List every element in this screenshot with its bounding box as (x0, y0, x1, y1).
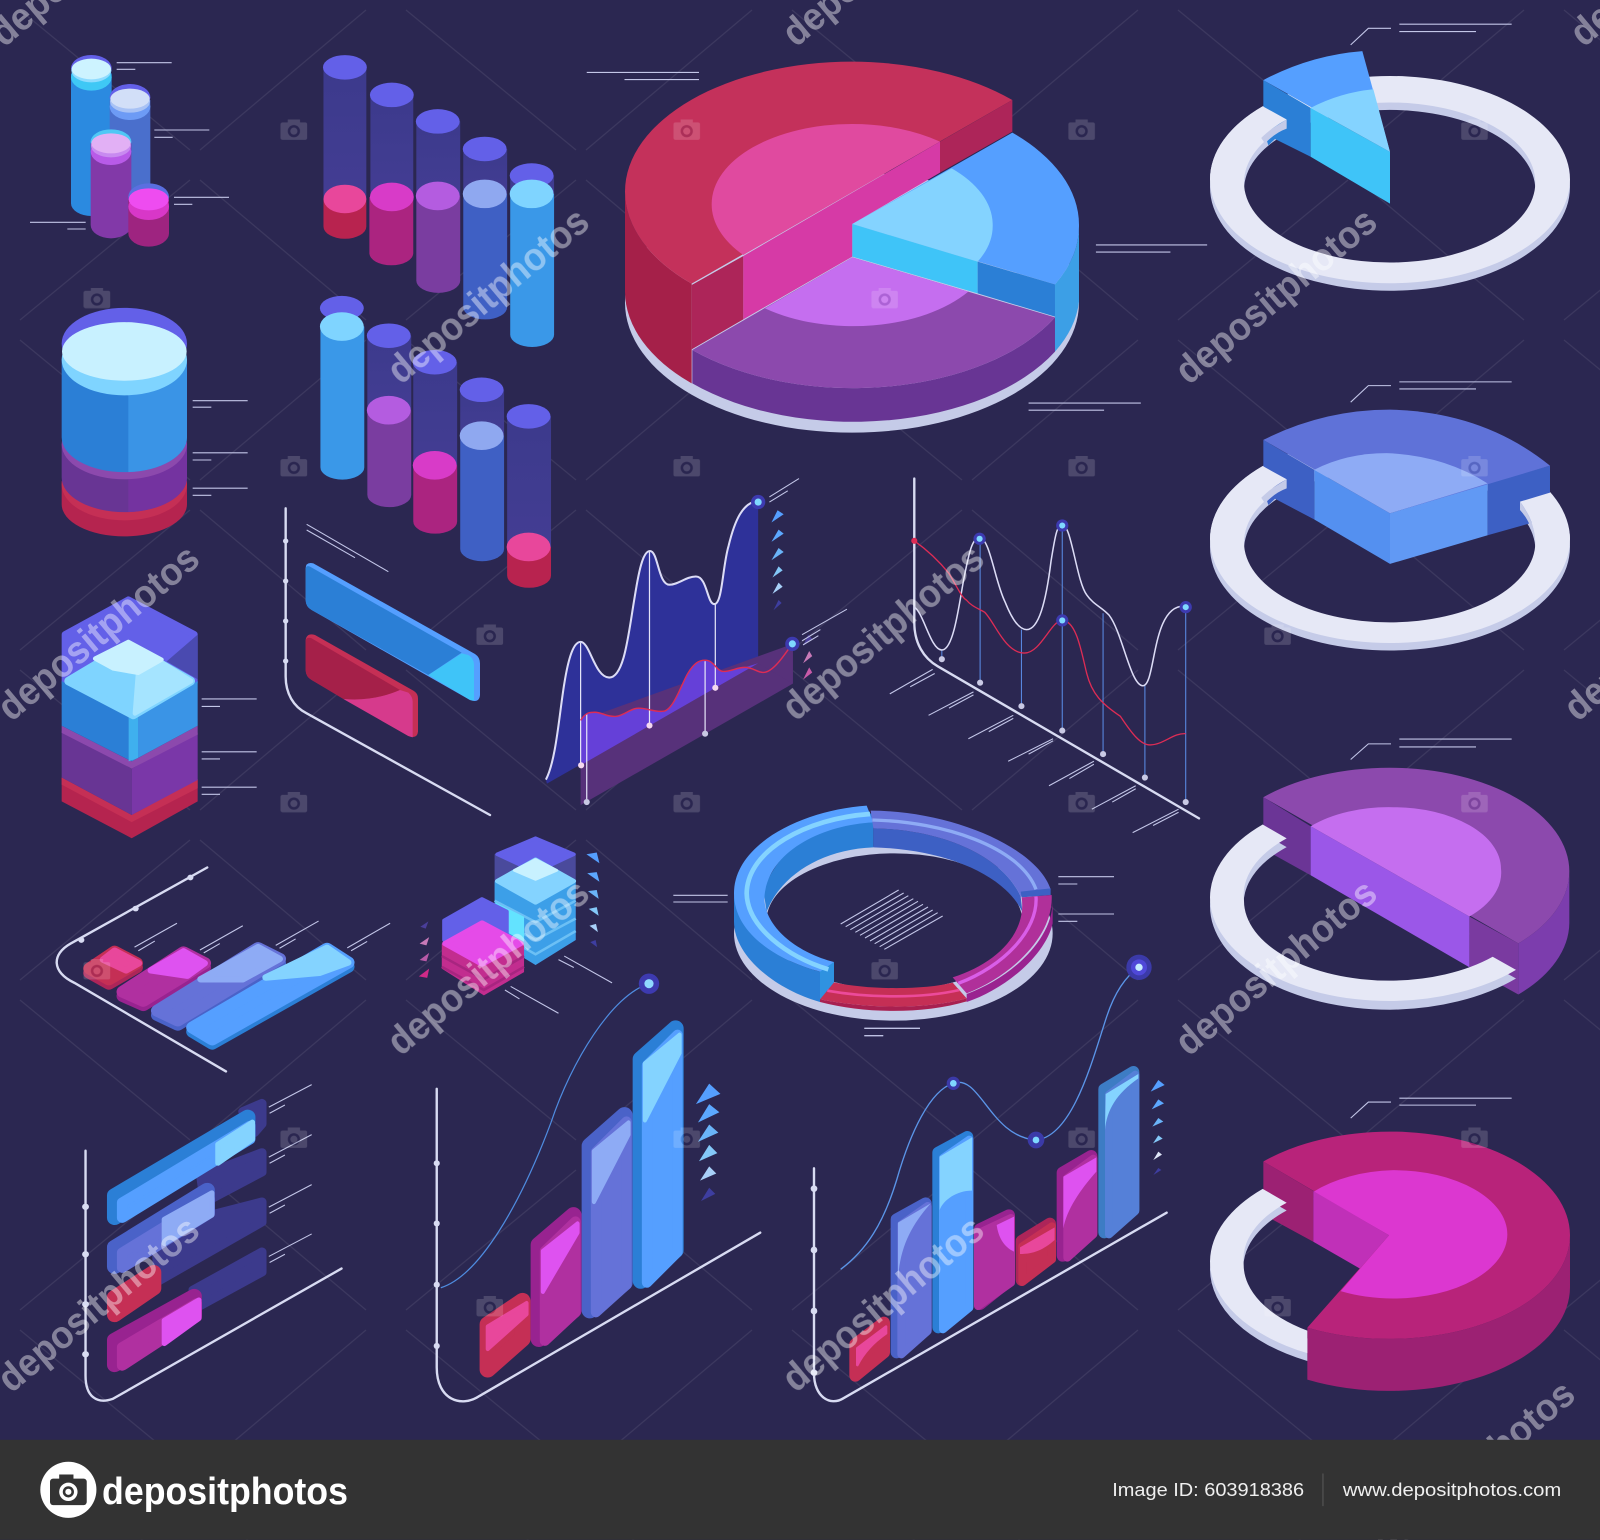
footer bar (0, 1440, 1600, 1540)
tilted bar pair with axis (283, 508, 490, 815)
upper cylinder row (323, 55, 554, 347)
main 3D pie chart (625, 62, 1079, 433)
diagonal watermark text: depositphotos (379, 871, 598, 1064)
chart: large cylinder and square stack at left (62, 308, 257, 838)
footer website: www.depositphotos.com (1342, 1479, 1561, 1500)
footer image id: Image ID: 603918386 (1112, 1479, 1304, 1500)
diagonal watermark text: depositphotos (774, 1208, 992, 1401)
ring with periwinkle slice (1210, 436, 1570, 651)
main coordinate group: pie labels, line charts, small bars (434, 72, 1207, 1401)
magenta arc segment (953, 895, 1053, 1002)
center hatch and labels (673, 877, 1114, 1036)
grouped bar chart with rising curve (434, 973, 760, 1401)
diagonal watermark text: depositphotos (1167, 871, 1385, 1064)
stacked horizontal progress bars (82, 1085, 342, 1401)
square layered stack (62, 600, 198, 838)
ring with blue-cyan slice (1210, 24, 1570, 291)
purple half pie on ring (1210, 739, 1569, 1010)
footer divider (1322, 1473, 1323, 1506)
isometric cube pair (419, 836, 612, 1013)
multi-line chart with axis (890, 479, 1199, 833)
footer logo wordmark: depositphotos (102, 1470, 348, 1512)
big layered cylinder (62, 308, 187, 536)
footer logo icon (40, 1462, 96, 1518)
chart: cylinder columns, upper and lower rows (320, 55, 554, 588)
bar chart with curve, lower center (811, 955, 1167, 1401)
periwinkle arc segment (871, 811, 1051, 912)
area chart (546, 479, 847, 805)
diagonal watermark text: depositphotos (379, 200, 598, 393)
lower cylinder row (320, 296, 551, 588)
magenta pie on ring (1210, 1098, 1570, 1391)
diagonal watermark text: depositphotos (1167, 200, 1385, 393)
lying bar chart, cube stacks and stacked horizontal bars (57, 836, 612, 1401)
chart: top-left cylinders (30, 55, 229, 247)
isometric lying bars (57, 867, 390, 1071)
watermark camera icons (84, 119, 1488, 1316)
pie label lines (587, 72, 1207, 410)
right column: ring with cyan wedge and ring with blue wedge (1210, 24, 1570, 651)
diagonal watermark text: depositphotos (774, 536, 992, 729)
right column: purple half pie and magenta pie with rings (1210, 739, 1570, 1391)
red arc segment (820, 982, 967, 1011)
blue arc segment (734, 805, 873, 1002)
donut ring chart (673, 805, 1114, 1036)
